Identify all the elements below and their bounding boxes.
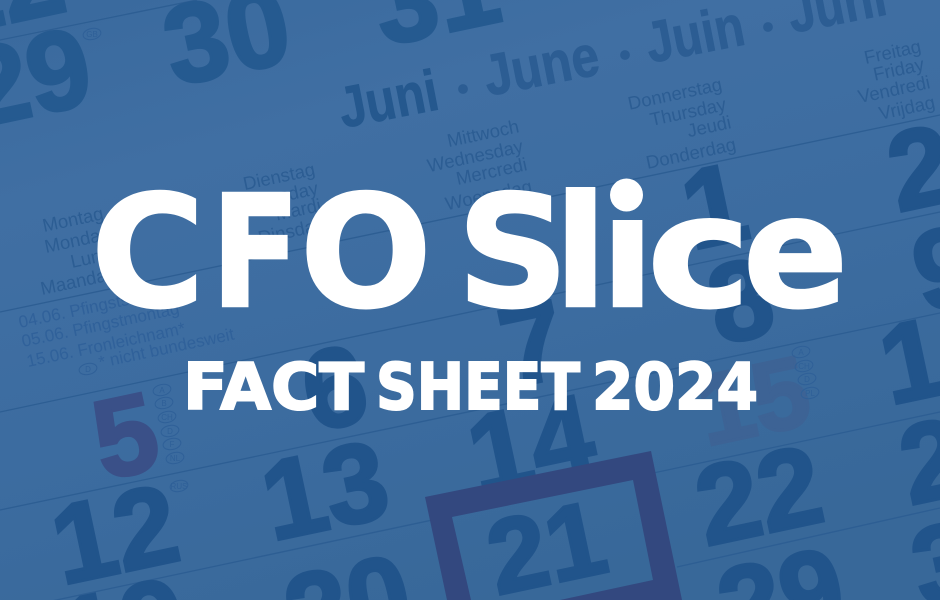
weekday labels: Friday: Vrijdag xyxy=(877,91,937,124)
subtitle: 2024 xyxy=(592,350,758,425)
weekday labels: Thursday: Donderdag xyxy=(644,133,738,173)
large calendar dates: 5 xyxy=(82,368,169,503)
holiday country markers xyxy=(78,27,820,493)
holiday notes: 04.06. Pfingstsonntag xyxy=(17,279,182,332)
title: l xyxy=(554,162,607,343)
title: O xyxy=(300,162,432,343)
weekday labels: Tuesday: Dienstag xyxy=(241,158,317,194)
weekday labels: Tuesday: Mardi xyxy=(273,194,323,225)
weekday labels: Monday: Lundi xyxy=(68,242,117,272)
weekday labels: Monday: Monday xyxy=(42,223,112,257)
weekday labels: Thursday: Jeudi xyxy=(685,111,733,141)
weekday labels: Friday: Friday xyxy=(871,53,927,85)
holiday country codes: CH xyxy=(161,413,173,422)
holiday notes xyxy=(19,296,234,366)
weekday labels: Tuesday: Dinsdag xyxy=(256,213,327,248)
weekday labels: Tuesday xyxy=(244,166,320,238)
title: i xyxy=(601,162,654,343)
holiday country codes: D xyxy=(804,375,810,384)
title xyxy=(97,178,842,310)
weekday labels: Wednesday: Mercredi xyxy=(454,153,529,189)
large calendar dates: 6 xyxy=(291,320,378,455)
holiday country codes: GB xyxy=(86,30,98,39)
large calendar dates: 14 xyxy=(457,370,605,518)
weekday labels: Wednesday: Wednesday xyxy=(425,135,526,176)
weekday labels: Wednesday xyxy=(426,120,532,210)
month heading xyxy=(341,0,886,127)
holiday notes: 15.06. Fronleichnam* xyxy=(25,319,187,371)
subtitle: SHEET xyxy=(376,350,580,425)
weekday labels: Monday: Maandag xyxy=(38,262,118,299)
month heading: June xyxy=(478,23,604,109)
month heading: Juni xyxy=(333,58,444,141)
holiday country codes: CH xyxy=(798,362,810,371)
highlighted date frame xyxy=(425,451,682,600)
large calendar dates: 8 xyxy=(697,233,784,368)
subtitle xyxy=(183,350,758,425)
title: S xyxy=(457,162,569,343)
large calendar dates: 1 xyxy=(671,138,758,273)
weekday labels: Friday xyxy=(857,42,935,119)
holiday country codes: F xyxy=(170,440,175,449)
holiday notes: 05.06. Pfingstmontag xyxy=(20,299,181,351)
weekday labels: Wednesday: Woensdag xyxy=(443,175,534,214)
weekday labels: Thursday: Donnerstag xyxy=(626,73,724,114)
holiday notes: * nicht bundesweit xyxy=(97,325,236,372)
holiday country codes: A xyxy=(798,348,804,357)
weekday labels: Monday xyxy=(41,210,104,294)
weekday labels: Friday: Vendredi xyxy=(856,71,932,107)
holiday country codes: RUS xyxy=(171,482,187,491)
weekday labels: Thursday: Thursday xyxy=(648,93,729,130)
holiday country codes: D xyxy=(85,365,91,374)
holiday country codes: NL xyxy=(170,454,181,463)
large calendar dates: 13 xyxy=(251,416,399,564)
large calendar dates: 15 xyxy=(687,335,819,468)
weekday labels: Monday: Montag xyxy=(40,203,105,236)
holiday country codes: A xyxy=(159,386,165,395)
holiday country codes: D xyxy=(167,427,173,436)
weekday labels: Wednesday: Mittwoch xyxy=(445,115,521,151)
title: F xyxy=(211,162,300,343)
weekday labels: Thursday xyxy=(628,80,736,168)
title: C xyxy=(91,162,205,343)
large calendar dates: 22 xyxy=(685,421,833,569)
subtitle: FACT xyxy=(183,350,364,425)
title: c xyxy=(647,162,751,343)
holiday country codes xyxy=(85,30,815,491)
holiday country codes: PL xyxy=(805,389,815,398)
holiday country codes: B xyxy=(161,399,167,408)
title: e xyxy=(743,162,848,343)
weekday labels: Tuesday: Tuesday xyxy=(247,177,321,213)
large calendar dates: 7 xyxy=(489,276,576,411)
weekday labels: Friday: Freitag xyxy=(862,35,923,68)
